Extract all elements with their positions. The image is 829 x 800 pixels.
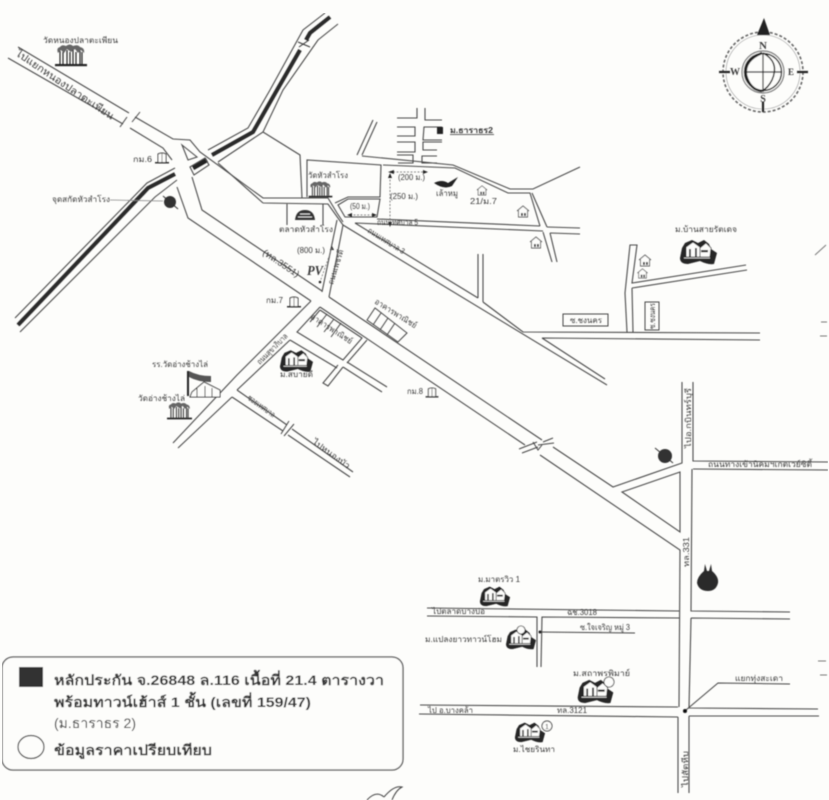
village: Ban Sai Rat Det: ม.บ้านสายรัตเดจ [675,225,737,234]
village: Matra View 1: ม.มาตรวิว 1 [478,575,521,584]
village: Chai Rinda with comparable marker 1 [513,721,555,754]
callout: soi Jai Charoen: ซ.ใจเจริญ หมู่ 3 [580,623,630,633]
street labels: ถนนเทศบาล 3 [366,226,407,256]
compass rose: N [759,40,767,52]
street labels: ถนนเพชรดี [326,249,345,286]
school: Wat Ang Chang Lai [152,360,220,397]
street labels: ไปหนองบัว [310,437,352,470]
legend text: collateral details: หลักประกัน จ.26848 ล.116 เนื้อที่ 21.4 ตารางวา [54,669,384,688]
street labels: ซอยเทศบาล [246,393,277,419]
soi Chongnakhon sign, vertical: ซ.ชงนคร [648,302,657,329]
street labels: ถนนเทศบาล 5 [377,218,418,227]
compass rose: E [788,67,794,77]
house 21/M.7: 21/ม.7 [470,197,498,206]
icon: gas station marker [655,448,673,463]
divided highway: south-west segment [15,168,177,332]
km marker 8: กม.8 [407,387,424,396]
road label: to Kabin Buri: ไปอ.กบินทร์บุรี [683,387,693,449]
legend text: collateral details: (ม.ธาราธร 2) [54,715,136,731]
temple: Wat Ang Chang Lai: วัดอ่างช้างไล่ [138,394,185,403]
distance labels with arrows: (200 ม.) [398,173,425,182]
road label: to Sattahip: ไปสัตหีบ [681,751,690,788]
landmark: pig farm [434,177,458,199]
village: Plaeng Yao Townhome: ม.แปลงยาวทาวน์โฮม [425,634,502,644]
landmark: Wat Nong Pla Taphian [43,36,119,66]
legend text: collateral details: พร้อมทาวน์เฮ้าส์ 1 ชั้น (เลขที่ 159/47) [54,691,311,710]
PV logo: PV [307,264,324,279]
checkpoint with leader line [52,194,178,209]
house 21/M.7 [470,186,498,206]
street labels: ถนนสุขาภิบาล [255,332,290,366]
village: Plaeng Yao Townhome [425,626,536,649]
road labels: route 3018: ไปตลาดบางบ่อ [431,607,485,616]
scan specks at right edge [815,245,827,675]
distance labels with arrows [297,170,428,283]
road label: highway 331: ทล.331 [682,536,691,567]
legend panel [2,657,403,770]
village: Sabai Di [280,350,313,379]
road label: to Nong Pla Taphian junction: ไปแยกหนองปลาตะเพียน [12,47,116,122]
road labels: route 3121: ทล.3121 [557,706,588,715]
compass rose [719,18,808,112]
landmark: Wat Nong Pla Taphian: วัดหนองปลาตะเพียน [43,36,119,45]
temple: Wat Ang Chang Lai [138,394,192,419]
landmark: pig farm: เล้าหมู [436,189,458,199]
village: Chai Rinda with comparable marker 1: 1 [545,724,549,731]
distance labels with arrows: (250 ม.) [390,192,418,201]
subject project label [437,126,494,135]
distance labels with arrows: (50 ม.) [350,202,370,211]
road labels: route 3121 [427,706,588,715]
landmark: Wat Hua Samrong: วัดหัวสำโรง [308,170,348,180]
road break marks [120,112,554,453]
landmark: Hua Samrong market: ตลาดหัวสำโรง [279,224,333,234]
legend swatch: comparable [18,736,44,758]
road label: Gateway City estate: ถนนทางเข้านิคมฯเกตเวย์ซิตี้ [708,458,813,469]
street labels: (ทล.3551) [261,247,301,279]
soi Chongnakhon sign, vertical [645,302,659,330]
callout: Thung Sadao junction: แยกทุ่งสะเดา [735,674,783,683]
village: Sabai Di: ม.สบายดี [280,370,313,379]
village: Sathaporn Phimai: ม.สถาพรพิมาย์ [573,668,630,678]
callout: soi Jai Charoen [538,623,635,634]
road labels: route 3121: ไป อ.บางคล้า [427,706,473,715]
divided highway: north-east segment [190,13,338,175]
landmark: Wat Hua Samrong [308,170,348,197]
parallel shop rows [310,308,407,342]
road labels: route 3018 [431,607,598,617]
km marker 6: กม.6 [133,155,153,164]
landmark: Hua Samrong market [279,210,333,234]
km marker 7 [266,296,301,308]
soi Chongnakhon sign, horizontal: ซ.ชงนคร [570,316,603,325]
km marker 7: กม.7 [266,296,284,305]
callout: Thung Sadao junction [683,674,790,713]
village: Chai Rinda with comparable marker 1: ม.ไชยรินทา [513,745,555,754]
street labels: อาคารพาณิชย์ [309,311,355,346]
street labels [246,218,419,470]
subject project label: ม.ธาราธร2 [450,126,494,135]
village: Sathaporn Phimai [573,668,630,703]
legend text: comparable price data: ข้อมูลราคาเปรียบเทียบ [54,742,212,759]
compass rose: W [730,67,740,78]
distance labels with arrows: (800 ม.) [297,246,325,255]
school: Wat Ang Chang Lai: รร.วัดอ่างช้างไล่ [152,360,208,369]
km marker 8 [407,387,438,398]
village: Ban Sai Rat Det [675,225,737,264]
village: Matra View 1 [478,575,521,606]
soi Chongnakhon sign, horizontal [563,314,608,326]
compass rose: S [760,94,766,105]
legend text: collateral details [54,669,384,731]
checkpoint with leader line: จุดสกัดหัวสำโรง [52,194,110,204]
road labels: route 3018: ฉช.3018 [567,608,598,617]
street labels: อาคารพาณิชย์ [373,296,419,330]
icon: dark drop landmark [697,564,718,591]
small houses [517,206,651,278]
km marker 6 [133,153,169,164]
legend swatch: collateral [19,667,43,687]
handwritten signature [367,787,402,800]
